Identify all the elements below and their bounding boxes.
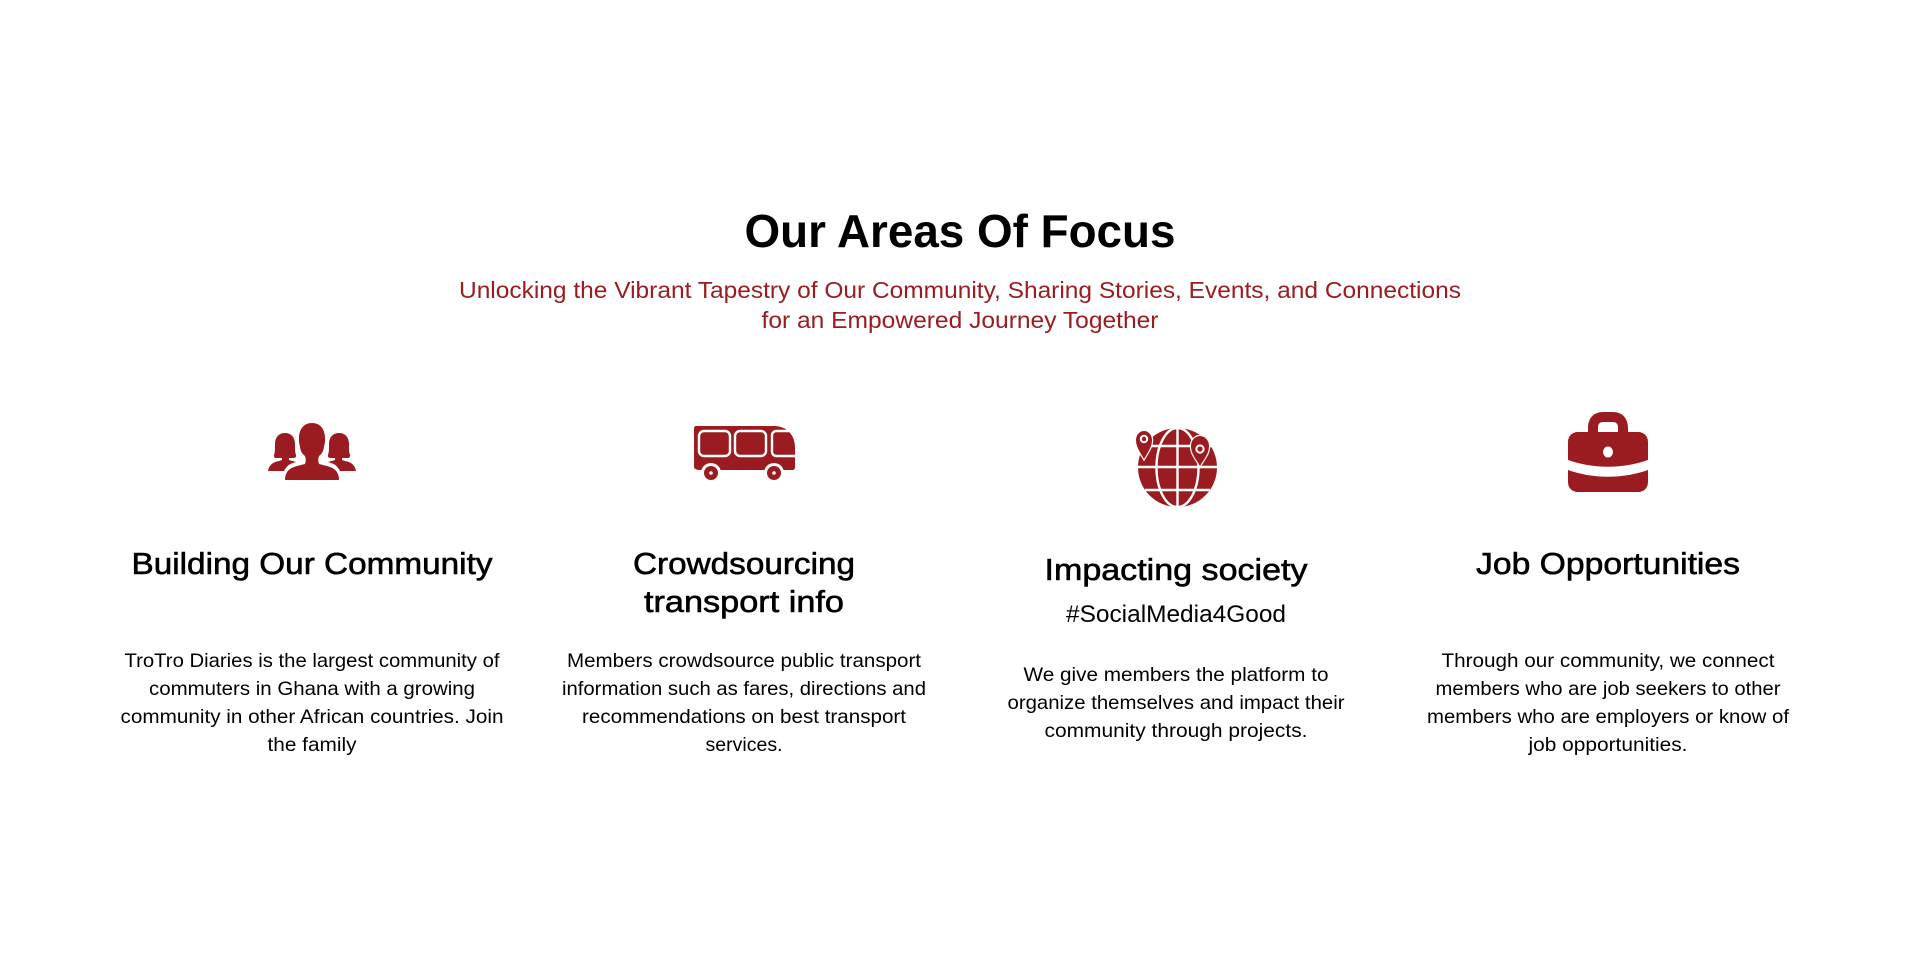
body text: recommendations on best transport [582, 706, 907, 728]
title: Our Areas Of Focus [744, 205, 1176, 257]
body text: Through our community, we connect [1442, 650, 1775, 672]
body text: job opportunities. [1527, 734, 1688, 756]
heading: Impacting society [1044, 552, 1308, 587]
panel: impacting society [1008, 426, 1345, 742]
subtitle [459, 277, 1461, 333]
body text: members who are job seekers to other [1436, 678, 1781, 700]
icon: bus [694, 426, 798, 483]
body text: services. [706, 734, 782, 756]
subtitle: Unlocking the Vibrant Tapestry of Our Community, Sharing Stories, Events, and Connections [459, 277, 1461, 303]
icon: people [268, 423, 356, 480]
body text: the family [268, 734, 357, 756]
body text: community in other African countries. Join [120, 706, 504, 728]
heading: Job Opportunities [1476, 546, 1740, 581]
body text [1427, 650, 1790, 756]
heading: Building Our Community [132, 546, 493, 581]
body text: information such as fares, directions and [562, 678, 926, 700]
body text: TroTro Diaries is the largest community of [124, 650, 500, 672]
body text [562, 650, 926, 756]
body text: Members crowdsource public transport [567, 650, 922, 672]
panel: building our community [120, 423, 504, 756]
body text [1008, 664, 1345, 742]
icon: briefcase [1568, 412, 1648, 492]
heading: transport info [644, 584, 844, 619]
body text: commuters in Ghana with a growing [149, 678, 475, 700]
body text: community through projects. [1044, 720, 1308, 742]
icon: globe with pins [1136, 426, 1219, 509]
subtitle: for an Empowered Journey Together [762, 307, 1159, 333]
body text [120, 650, 504, 756]
panel: crowdsourcing transport info [562, 426, 926, 756]
heading: Crowdsourcing [633, 546, 855, 581]
heading [633, 546, 855, 619]
body text: organize themselves and impact their [1008, 692, 1345, 714]
hashtag: #SocialMedia4Good [1066, 601, 1286, 628]
panel: job opportunities [1427, 412, 1790, 756]
body text: members who are employers or know of [1427, 706, 1790, 728]
body text: We give members the platform to [1024, 664, 1329, 686]
